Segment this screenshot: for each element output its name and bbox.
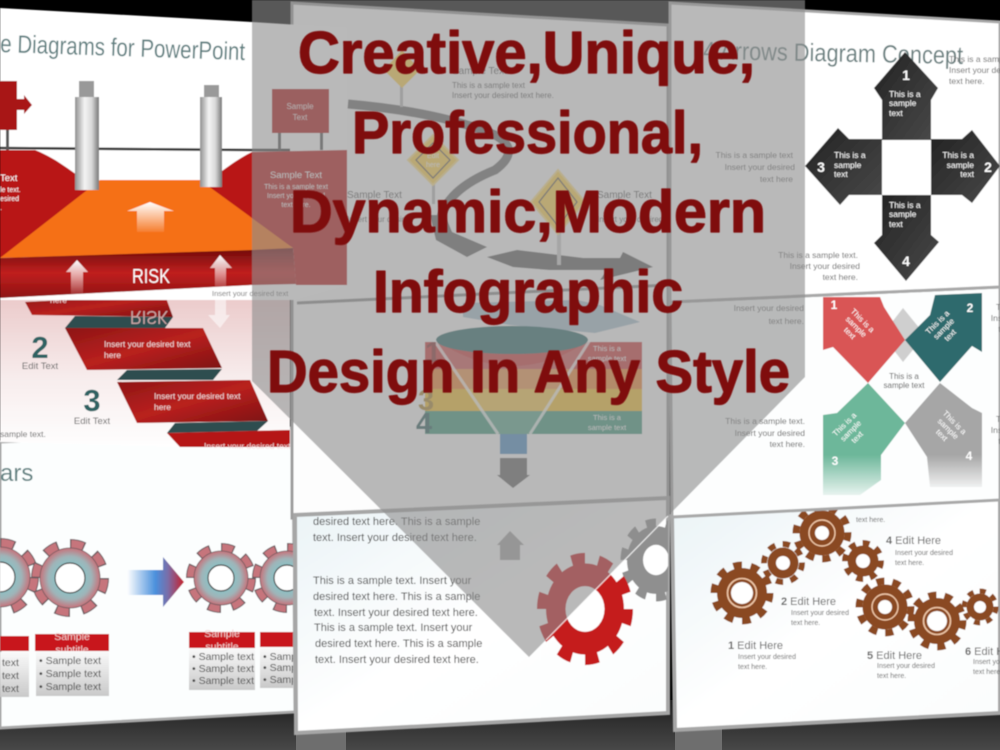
arrow: red [823,297,905,383]
funnel bands: 3 [418,385,434,417]
arrow numbers and labels: text [934,428,950,444]
arrow numbers and labels: text [842,326,858,342]
arrow numbers and labels: This is a [831,410,859,438]
subtitle boxes and lists: • Sample text [39,655,101,667]
funnel bands: This is a [593,413,622,422]
funnel bands: This is a [593,344,622,353]
step ribbons: here [154,402,171,412]
center sample box: Text [293,113,308,122]
gear cluster right [192,548,316,608]
paragraph text: text. Insert your desired text here. [314,607,478,619]
gear labels: text here. [856,517,885,524]
cross arrow labels: 3 [817,159,825,175]
side captions: Insert your desired [734,303,804,313]
subtitle boxes and lists: text [2,670,19,682]
funnel bands: sample text [588,423,627,432]
side captions: This is a sample text. [725,416,805,426]
cross arrow labels [817,67,992,269]
arrow: gray [905,383,982,487]
arrow numbers and labels: 3 [832,454,839,468]
gear labels: 4 Edit Here [886,535,941,547]
gear labels: Insert your desired [895,550,953,557]
cross arrow labels: This is a [889,200,921,210]
orange trapezoid [0,180,293,258]
red hills: Sample Text [270,170,322,181]
gear labels [728,517,1000,680]
cross arrow labels: 2 [984,159,992,175]
captions: text here [760,174,793,184]
side captions: text here. [769,316,804,326]
cross arrow labels: 4 [902,253,910,269]
risk label: RISK [132,266,171,288]
subtitle boxes and lists: • Sample text [192,651,254,663]
faint lower arrow [463,300,640,333]
captions: This is a sample text. [778,250,858,260]
subtitle boxes and lists: subtitle [205,641,239,653]
gear labels: text here. [791,620,820,627]
paragraph text: This is a sample text. Insert your [314,622,473,634]
rail [0,148,290,150]
lower reflection arrow [208,295,230,328]
overflow caption: Insert your desired text [212,289,289,298]
subtitle boxes and lists: text [2,657,19,669]
step caption: sample text. [0,429,46,439]
side captions: Insert your desired [735,428,805,438]
cross arrow labels: This is a [834,150,866,160]
arrow: green [823,383,905,495]
arrow numbers and labels: 4 [966,449,973,463]
paragraph text: This is a sample text. Insert your [313,575,472,587]
step ribbons: here [104,350,121,360]
slide title: 4 Arrows Diagram Concept [703,37,963,70]
gear labels: Insert your desired [738,654,796,661]
band arrows [66,255,232,295]
arrow numbers and labels: This is a [849,307,877,335]
floor band [0,700,1000,750]
cross arrow labels: sample [834,160,862,170]
gear labels: text here. [895,560,924,567]
panel: brown gears, bottom right [672,498,1000,730]
subtitle boxes and lists: • Sample text [39,668,101,680]
captions: This is a sample text [716,150,794,160]
side captions: text here. [770,439,805,449]
panel: step list, middle left [0,299,291,449]
step ribbons: Insert your desired text [104,339,191,349]
arrow numbers and labels: 1 [831,298,838,312]
center square [886,143,927,190]
red hills: . [0,205,2,212]
captions: Insert your desired [725,162,795,172]
gear labels: Insert your desired [877,663,935,670]
title: Professional, [352,100,703,166]
step number 3 [74,389,110,424]
arrow numbers and labels: sample text [884,381,925,390]
subtitle boxes and lists: • Sample text [192,675,254,687]
subtitle boxes and lists: • Sample text [192,663,254,675]
overlay chevron [252,0,805,657]
panel: gears process, bottom left [0,428,325,728]
cross arrow labels: sample [947,160,974,170]
step number 3: 3 [83,383,101,418]
arrow numbers and labels: 2 [967,301,974,315]
subtitle boxes and lists: • Sample text [263,651,325,663]
red hills: esired [0,196,19,203]
cross arrow labels: text [960,169,975,179]
red hills: Text [0,173,18,184]
title [267,20,790,405]
arrow numbers and labels: This is a [941,409,969,437]
risk band [0,248,296,298]
pillars [75,81,222,190]
cross arrow labels: 1 [902,67,910,83]
step number 2: Edit Text [22,361,58,372]
subtitle boxes and lists: text [2,683,19,695]
red hills [0,150,347,285]
road captions: Insert your desired text here. [452,91,554,100]
panel: risk diagram, top left [0,8,347,328]
funnel bands: sample text [588,354,627,363]
arrow numbers and labels: This is a [924,308,952,336]
subtitle boxes and lists: subtitle [55,644,89,656]
red hills: Insert your desired [267,193,325,200]
panel: four colored arrows, middle right [670,287,1000,517]
title: Infographic [373,259,683,325]
sign with arrow [0,81,32,150]
step ribbons [25,295,291,451]
road captions: Sample Text [347,190,402,201]
step number 2 [22,336,58,370]
road captions: Insert your desired [347,215,413,224]
center sample box: Sample [286,102,314,111]
slide title fragment: ars [0,460,33,487]
step number 3: Edit Text [74,416,110,427]
cross arrow labels: This is a [942,150,974,160]
gear labels: text here. [738,664,767,671]
gear labels: 2 Edit Here [781,596,836,608]
panel: text with gears, center bottom [295,498,687,733]
funnel bands: 4 [416,408,432,440]
panel: road and funnel, center [292,3,668,518]
arrow numbers and labels: This is a [889,372,919,381]
title: Creative,Unique, [298,20,755,86]
icon: faint house [497,531,524,560]
road captions: Insert your desired [597,215,663,224]
paragraph text: desired text here. This is a sample [313,591,480,603]
road captions: Sample Text [452,66,507,77]
road signs [384,50,585,265]
arrow: center diamond [892,308,918,362]
cross arrow labels: sample [889,209,917,219]
icon: red gear [542,559,628,659]
overlay seam line [546,516,668,640]
step ribbons: Insert your desired text [154,391,241,401]
subtitle boxes and lists: Sample [54,631,90,643]
panel: four arrows concept, top right [670,3,1000,302]
center sample box [272,89,329,150]
arrow numbers and labels: text [943,327,959,343]
arrow numbers and labels: sample [936,417,961,442]
road captions: This is a sample text [452,81,526,90]
cross arrow labels: text [889,219,903,229]
red hills: text here. [281,202,311,209]
title: Design In Any Style [267,339,790,405]
step ribbons: here [50,295,67,305]
subtitle boxes and lists: • Sample text [263,662,325,674]
gear labels: Insert your desired [791,610,849,617]
paragraph text [313,516,482,666]
red hills: le text. [0,187,21,194]
arrow numbers and labels: sample [839,418,864,443]
paragraph text: text. Insert your desired text here. [315,654,479,666]
gear labels: text here. [877,673,906,680]
gear cluster left [0,544,103,611]
cross arrow labels: This is a [889,89,921,99]
road captions [347,66,663,224]
subtitle boxes and lists: • Sample text [39,681,101,693]
paragraph text: desired text here. This is a sample [315,638,482,650]
black cross arrows [805,52,1000,281]
slide title: e Diagrams for PowerPoint [0,30,246,66]
road [348,104,653,280]
cross arrow labels: text [834,169,848,179]
icon: gray gear [625,524,687,596]
arrow numbers and labels [831,298,974,468]
funnel bands: 1 [425,337,441,369]
arrow numbers and labels: sample [844,315,869,340]
brown gear chain [714,507,996,647]
title: Dynamic,Modern [290,179,766,245]
risk reflection: RISK [130,307,168,327]
subtitle boxes and lists: Sample [204,628,240,640]
arrow: teal [905,293,982,382]
road signs: here [426,162,440,169]
arrow: blue to red [127,557,184,607]
gear labels: 1 Edit Here [728,640,783,652]
road signs: Edit [427,153,439,160]
arrow numbers and labels: text [850,429,866,445]
cross arrow labels: sample [889,98,917,108]
paragraph text: desired text here. This is a sample [313,516,480,528]
white up arrow [127,202,174,232]
step number 2: 2 [31,330,49,365]
subtitle boxes and lists [0,630,294,698]
step ribbons: Insert your desired text [204,441,291,451]
captions: text here. [949,76,984,86]
paragraph text: text. Insert your desired text here. [313,532,477,544]
red hills: This is a sample text [264,184,328,191]
gear labels: 5 Edit Here [867,650,922,662]
arrow numbers and labels: sample [932,316,957,341]
captions [716,54,1000,282]
captions: Insert your desired [790,261,860,271]
captions: text here. [823,272,858,282]
subtitle boxes and lists: • Sample text [263,674,325,686]
side captions [725,302,1000,449]
cross arrow labels: text [889,108,903,118]
funnel bands [416,326,642,488]
road captions: Sample Text [597,190,652,201]
